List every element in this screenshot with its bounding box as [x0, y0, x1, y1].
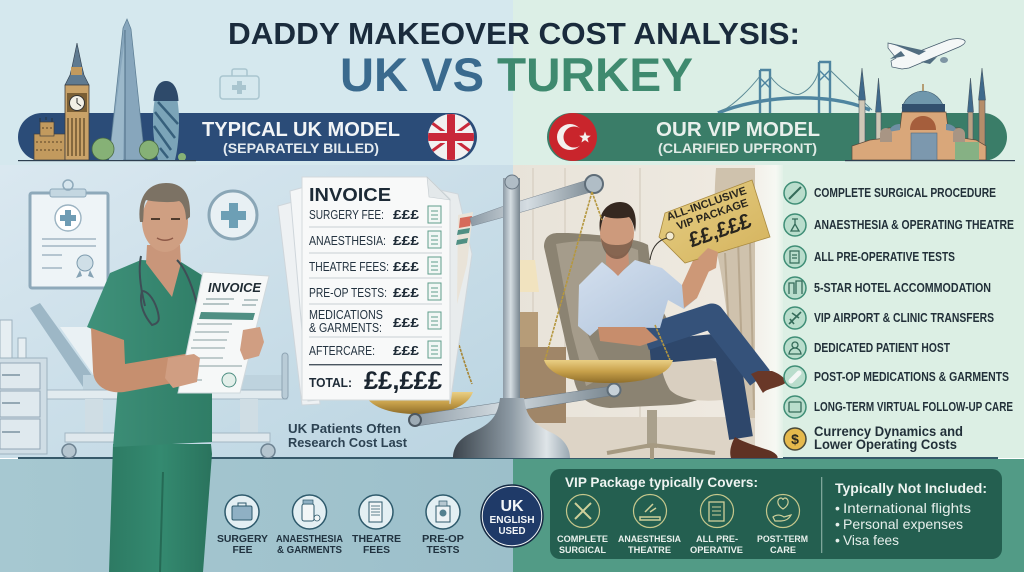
row: medications	[784, 366, 1009, 388]
row: currency dynamics: Lower Operating Costs	[814, 437, 957, 452]
minarets	[858, 68, 986, 152]
item: post-term care	[757, 494, 808, 556]
panel: VIP package covers and exclusions	[550, 469, 1002, 559]
certificate on clipboard	[30, 180, 108, 288]
title: DADDY MAKEOVER COST ANALYSIS:	[228, 17, 800, 51]
upper beam	[470, 178, 598, 226]
badge: UK English used: UK	[500, 498, 524, 515]
item: theatre fees: THEATRE	[352, 533, 401, 545]
building body	[852, 112, 986, 160]
scale	[409, 175, 673, 458]
back pages	[278, 201, 320, 405]
item: theatre fees: FEES	[363, 544, 390, 556]
item: complete surgical: COMPLETE	[557, 534, 608, 545]
stacked invoice: £££	[393, 285, 420, 300]
banner: our VIP model: OUR VIP MODEL	[656, 119, 820, 141]
The Shard	[109, 19, 145, 160]
scene: clinic room	[0, 180, 288, 458]
row: currency dynamics: Currency Dynamics and	[814, 424, 963, 439]
chains	[545, 192, 670, 360]
stacked invoice: INVOICE	[309, 185, 391, 205]
price tag: VIP PACKAGE	[675, 197, 750, 233]
hair	[600, 202, 636, 232]
illustration: London skyline	[18, 19, 196, 161]
icon: medical case	[220, 69, 259, 99]
row: pre-operative tests	[784, 246, 955, 268]
caption: research cost last: Research Cost Last	[288, 435, 408, 450]
list: not included: International flights	[843, 500, 971, 516]
invoice rows: PRE-OP TESTS:	[309, 286, 387, 300]
banner: typical UK model: TYPICAL UK MODEL	[202, 119, 400, 141]
shoes	[730, 437, 778, 458]
stacked invoice: £££	[393, 259, 420, 274]
item: pre-op tests	[422, 495, 464, 556]
item: all pre-operative: ALL PRE-	[696, 534, 738, 545]
icon: Turkish flag	[549, 113, 597, 161]
heading: covers: VIP Package typically Covers:	[565, 474, 758, 490]
hospital bed	[30, 303, 288, 458]
icon: UK flag	[428, 114, 474, 160]
list: VIP inclusions	[784, 182, 1014, 452]
curtain	[714, 168, 755, 418]
UK fee icons strip	[217, 495, 464, 556]
list: not included: Visa fees	[843, 532, 899, 548]
stacked invoice	[278, 177, 473, 405]
item: surgery fee: FEE	[232, 544, 252, 556]
lower beam	[415, 386, 615, 426]
item: anaesthesia and garments: ANAESTHESIA	[276, 533, 343, 545]
list: not included: •	[835, 532, 840, 548]
row: hotel	[784, 277, 991, 299]
item: all pre-operative: OPERATIVE	[690, 545, 743, 556]
item: theatre fees	[352, 495, 401, 556]
wall clock with cross	[209, 191, 257, 239]
invoice rows: ANAESTHESIA:	[309, 234, 386, 248]
item: surgery fee: SURGERY	[217, 533, 268, 545]
banner: typical UK model: (SEPARATELY BILLED)	[223, 140, 379, 156]
armchair	[544, 233, 738, 459]
caption: research cost last	[288, 421, 408, 450]
side table	[520, 312, 566, 423]
title: UK VS	[340, 48, 484, 101]
list: not included	[835, 500, 971, 548]
item: complete surgical: SURGICAL	[559, 545, 606, 556]
item: anaesthesia and garments: & GARMENTS	[277, 544, 342, 556]
stacked invoice: ££,£££	[364, 367, 442, 395]
item: surgery fee	[217, 495, 268, 556]
list: not included: Personal expenses	[843, 516, 963, 532]
main dome	[902, 91, 944, 108]
row: anaesthesia and theatre	[784, 214, 1014, 236]
stacked invoice: £££	[393, 207, 420, 222]
hands	[165, 354, 200, 388]
badge: UK English used	[481, 485, 543, 547]
scene: luxury room	[513, 165, 785, 462]
badge: UK English used: ENGLISH	[490, 514, 534, 526]
trees	[92, 138, 186, 161]
head	[600, 210, 634, 256]
medical cabinet	[0, 320, 47, 454]
list: not included: •	[835, 500, 840, 516]
Parliament	[34, 117, 65, 160]
illustration: Bosphorus bridge	[718, 62, 872, 114]
invoice rows: AFTERCARE:	[309, 344, 375, 358]
banner: typical UK model	[18, 113, 477, 161]
price tag: ALL-INCLUSIVE	[665, 185, 748, 224]
invoice rows	[309, 208, 389, 358]
row: follow-up care	[784, 396, 1013, 418]
Big Ben	[65, 43, 89, 160]
neck	[606, 248, 629, 276]
scrubs top	[87, 260, 212, 447]
invoice rows: & GARMENTS:	[309, 321, 382, 335]
holding hand	[698, 248, 718, 274]
row: patient host: DEDICATED PATIENT HOST	[814, 340, 950, 355]
front page	[302, 177, 450, 400]
item: anaesthesia theatre: ANAESTHESIA	[618, 534, 681, 545]
row: hotel: 5-STAR HOTEL ACCOMMODATION	[814, 280, 991, 295]
hair	[139, 183, 190, 222]
banner: our VIP model: (CLARIFIED UPFRONT)	[658, 140, 817, 156]
wall mouldings	[533, 168, 640, 417]
sheer	[755, 165, 785, 458]
stacked invoice: TOTAL:	[309, 375, 352, 390]
title	[228, 17, 800, 101]
legs	[650, 345, 741, 438]
item: anaesthesia and garments	[276, 495, 343, 556]
item: post-term care: CARE	[770, 545, 796, 556]
item: all pre-operative	[690, 494, 743, 556]
illustration: Hagia Sophia	[845, 68, 1015, 161]
head	[142, 190, 188, 252]
row: patient host	[784, 337, 950, 359]
invoice rows: SURGERY FEE:	[309, 208, 384, 222]
resting forearm and hand	[598, 327, 658, 346]
floor	[536, 417, 755, 458]
banner: our VIP model	[547, 113, 1007, 161]
row: currency dynamics	[784, 424, 963, 452]
trousers	[109, 444, 212, 572]
row: transfers	[784, 307, 994, 329]
list: not included: •	[835, 516, 840, 532]
illustration: airplane	[888, 39, 965, 69]
pole	[503, 178, 520, 408]
raised forearm	[682, 254, 713, 308]
item: anaesthesia theatre: THEATRE	[628, 545, 671, 556]
doctor with invoice	[87, 183, 269, 572]
row: complete surgical procedure	[784, 182, 996, 204]
heading: not included: Typically Not Included:	[835, 480, 987, 496]
price tag: ££,£££	[686, 209, 754, 252]
base	[453, 398, 570, 458]
eyes and smile	[151, 218, 180, 220]
item: pre-op tests: TESTS	[426, 544, 460, 556]
invoice rows: THEATRE FEES:	[309, 260, 389, 274]
arm	[91, 328, 200, 392]
stethoscope	[140, 256, 197, 325]
title: TURKEY	[497, 48, 693, 101]
row: pre-operative tests: ALL PRE-OPERATIVE TESTS	[814, 249, 955, 264]
man in armchair	[544, 202, 787, 459]
row: currency dynamics: $	[791, 431, 799, 447]
beard	[601, 238, 633, 259]
invoice rows: MEDICATIONS	[309, 308, 383, 322]
neck and v	[146, 245, 181, 297]
row document icons	[428, 206, 441, 358]
right pan	[544, 360, 673, 383]
lamp	[520, 260, 539, 292]
stacked invoice: £££	[393, 233, 420, 248]
item: anaesthesia theatre	[618, 494, 681, 556]
stacked invoice: £££	[393, 343, 420, 358]
item: pre-op tests: PRE-OP	[422, 533, 464, 545]
item: post-term care: POST-TERM	[757, 534, 808, 545]
The Gherkin	[153, 81, 179, 160]
hand-held invoice	[178, 272, 269, 393]
caption: research cost last: UK Patients Often	[288, 421, 401, 436]
stacked invoice: £££	[393, 315, 420, 330]
hand-held invoice: INVOICE	[208, 280, 261, 295]
scale rear pan and beam	[363, 318, 473, 414]
price tag	[650, 180, 770, 274]
shirt	[578, 260, 697, 336]
item: complete surgical	[557, 494, 608, 556]
badge: UK English used: USED	[498, 525, 526, 537]
